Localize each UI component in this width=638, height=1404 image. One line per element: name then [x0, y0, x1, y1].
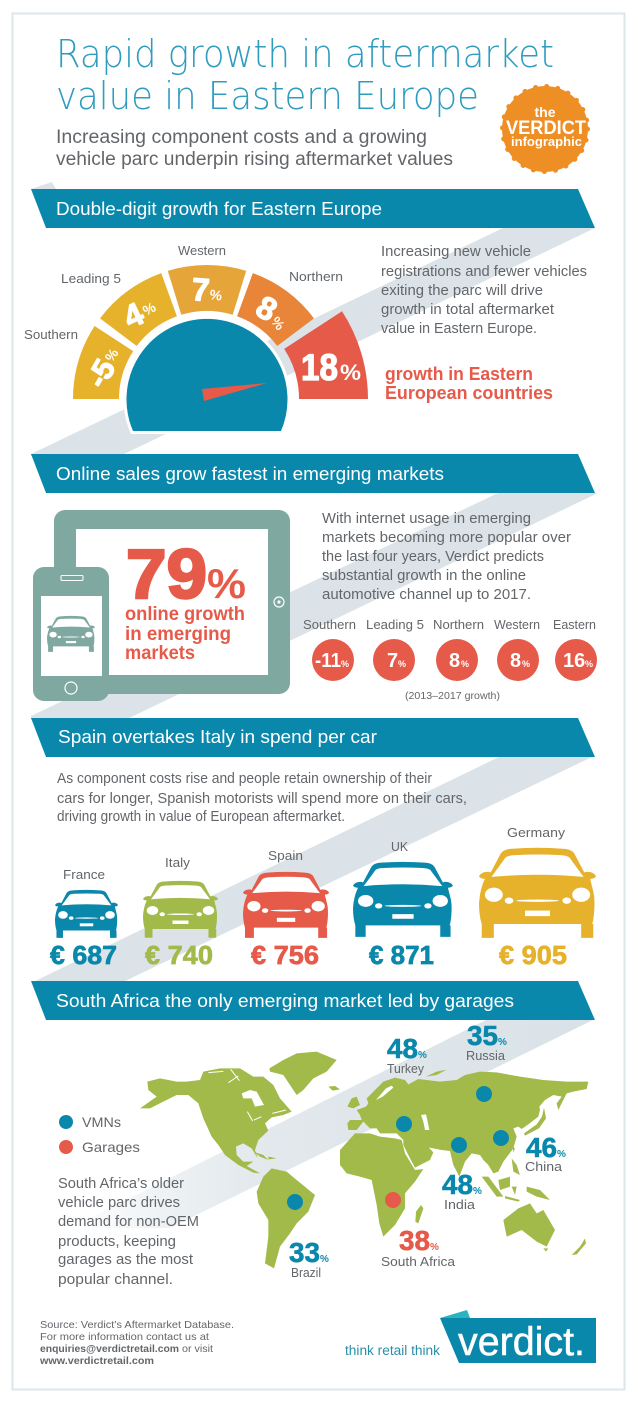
car: Germany: € 905 — [499, 940, 567, 970]
text: South Africa explanation: vehicle parc drives — [58, 1195, 180, 1211]
gauge segment: Western: Western — [178, 243, 226, 258]
logo: verdict — [440, 1310, 596, 1364]
source note — [39, 1319, 234, 1367]
title — [56, 32, 554, 118]
badge: the Verdict infographic: infographic — [511, 135, 582, 149]
stat: 79% online growth: in emerging — [125, 624, 231, 645]
region: Southern: % — [341, 659, 349, 669]
text: vehicle registrations: registrations and fewer vehicles — [381, 264, 587, 280]
text: internet usage: With internet usage in emerging — [322, 511, 531, 527]
legend — [59, 1114, 140, 1155]
banner: Spain overtakes Italy — [31, 718, 595, 757]
gauge segment: Leading 5 — [61, 271, 177, 346]
badge: the Verdict infographic — [502, 86, 588, 172]
region: Northern: % — [461, 659, 469, 669]
text: component costs: As component costs rise and people retain ownership of their — [57, 771, 432, 787]
gauge segment: Southern: -5 — [80, 354, 122, 394]
label: China 46%: % — [557, 1149, 566, 1160]
label: Russia 35% — [466, 1020, 507, 1063]
region: Eastern: 16 — [563, 650, 585, 672]
text: internet usage — [322, 511, 571, 603]
map marker: India — [451, 1137, 467, 1153]
label: Brazil 33% — [289, 1237, 329, 1280]
label: South Africa 38%: South Africa — [381, 1254, 456, 1269]
label: Russia 35%: 35 — [467, 1020, 498, 1051]
subtitle — [56, 127, 453, 170]
banner: online sales: Online sales grow fastest in emerging markets — [56, 464, 444, 484]
text: South Africa explanation: garages as the most — [58, 1252, 193, 1268]
car: Italy: Italy — [165, 855, 191, 870]
car: UK: UK — [391, 839, 408, 854]
label: China 46% — [525, 1132, 566, 1174]
label: India 48%: % — [473, 1186, 482, 1197]
map: Africa and Eurasia — [340, 1070, 588, 1255]
label: China 46%: 46 — [526, 1132, 557, 1163]
gauge segment: Eastern 18% — [284, 311, 368, 399]
subtitle: Increasing component costs and a growing — [56, 127, 427, 148]
gauge segment: Western: 7 — [191, 271, 211, 308]
car: Spain — [243, 848, 329, 970]
text: vehicle registrations: value in Eastern Europe. — [381, 321, 537, 337]
banner: online sales — [31, 454, 595, 493]
map marker: Turkey — [396, 1116, 412, 1132]
label: Russia 35%: % — [498, 1037, 507, 1048]
label: Brazil 33%: % — [320, 1254, 329, 1265]
car: Spain: Spain — [268, 848, 303, 863]
gauge segment: Southern: Southern — [24, 327, 78, 342]
region: Leading 5: % — [398, 659, 406, 669]
legend: Garages — [82, 1139, 140, 1155]
car: Germany — [479, 825, 596, 970]
region: Southern: Southern — [303, 617, 356, 632]
text: South Africa explanation: demand for non-OEM — [58, 1214, 199, 1230]
label: Turkey 48%: % — [418, 1050, 427, 1061]
label: Brazil 33%: 33 — [289, 1237, 320, 1268]
banner: Spain overtakes Italy: Spain overtakes Italy in spend per car — [58, 727, 377, 747]
map marker: South Africa — [385, 1192, 401, 1208]
title: Rapid growth in aftermarket — [56, 32, 554, 76]
region: Eastern — [553, 617, 597, 681]
label: India 48% — [442, 1169, 482, 1212]
car: UK: € 871 — [369, 940, 434, 970]
stat: 79% online growth: 79 — [126, 535, 207, 613]
region: Leading 5 — [366, 617, 424, 681]
gauge segment: Eastern 18%: 18 — [301, 347, 338, 388]
source note: For more information contact us at — [40, 1331, 209, 1343]
icon: tablet — [54, 510, 290, 694]
callout: growth in Eastern European countries: growth in Eastern — [385, 364, 533, 384]
text: component costs — [57, 771, 467, 825]
source note: or visit — [182, 1343, 213, 1355]
car: UK — [353, 839, 453, 970]
region: Western: Western — [494, 617, 540, 632]
badge: the Verdict infographic: the — [534, 104, 556, 120]
subtitle: vehicle parc underpin rising aftermarket values — [56, 149, 453, 170]
source note: Source: Verdict’s Aftermarket Database. — [40, 1319, 234, 1331]
text: internet usage: automotive channel up to 2017. — [322, 587, 531, 603]
map marker: Brazil — [287, 1194, 303, 1210]
text: South Africa explanation: South Africa’s older — [58, 1176, 184, 1192]
title: value in Eastern Europe — [56, 74, 479, 118]
gauge segment: Leading 5: 4 — [118, 295, 149, 335]
car: France — [50, 867, 118, 970]
region: Northern — [433, 617, 484, 681]
label: Russia 35%: Russia — [466, 1048, 506, 1063]
banner: South Africa — [31, 981, 595, 1020]
text: internet usage: markets becoming more popular over — [322, 530, 571, 546]
callout: growth in Eastern European countries — [385, 364, 553, 403]
source note: enquiries@verdictretail.com — [40, 1343, 179, 1355]
label: Brazil 33%: Brazil — [291, 1265, 321, 1280]
label: Turkey 48%: 48 — [387, 1033, 418, 1064]
gauge segment: Southern — [24, 326, 133, 399]
gauge segment: Northern — [237, 269, 343, 346]
gauge chart — [24, 243, 368, 432]
region: Eastern: Eastern — [553, 617, 596, 632]
label: South Africa 38%: 38 — [399, 1225, 430, 1256]
region: Leading 5: Leading 5 — [366, 617, 424, 632]
region: Northern: Northern — [433, 617, 484, 632]
text: vehicle registrations: Increasing new vehicle — [381, 244, 531, 260]
region: Southern — [303, 617, 356, 681]
car: Germany: Germany — [507, 825, 566, 840]
car: France: € 687 — [50, 940, 117, 970]
legend: VMNs — [82, 1114, 121, 1130]
banner: double-digit growth: Double-digit growth for Eastern Europe — [56, 199, 382, 219]
gauge segment: Northern: % — [268, 313, 289, 333]
gauge segment: Western — [168, 243, 246, 315]
stat: 79% online growth: % — [207, 560, 246, 607]
car: Italy: € 740 — [145, 940, 213, 970]
region: Western: 8 — [510, 650, 521, 672]
text: vehicle registrations — [381, 244, 587, 337]
region: Leading 5: 7 — [387, 650, 398, 672]
text: component costs: driving growth in value of European aftermarket. — [57, 809, 345, 825]
text: internet usage: the last four years, Verdict predicts — [322, 549, 544, 565]
text: internet usage: substantial growth in the online — [322, 568, 526, 584]
label: South Africa 38%: % — [430, 1242, 439, 1253]
callout: growth in Eastern European countries: European countries — [385, 383, 553, 403]
region: Western: % — [522, 659, 530, 669]
region: Eastern: % — [585, 659, 593, 669]
label: India 48%: India — [444, 1197, 476, 1212]
stat: 79% online growth: markets — [125, 643, 195, 664]
banner: double-digit growth — [31, 182, 595, 228]
gauge segment: Western: % — [209, 286, 224, 304]
text: South Africa explanation — [58, 1176, 199, 1288]
gauge segment: Southern: % — [101, 345, 122, 365]
gauge segment: Northern: Northern — [289, 269, 343, 284]
chart: online growth by region — [303, 617, 597, 702]
gauge segment: Northern: 8 — [250, 288, 283, 328]
label: China 46%: China — [525, 1159, 563, 1174]
car: Italy — [143, 855, 218, 970]
car: Spain: € 756 — [251, 940, 319, 970]
text: South Africa explanation: popular channel. — [58, 1272, 173, 1288]
map marker: Russia — [476, 1086, 492, 1102]
gauge needle — [202, 383, 267, 401]
logo: verdict: verdict. — [458, 1320, 585, 1364]
gauge dial — [125, 317, 289, 432]
label: Turkey 48% — [387, 1033, 427, 1076]
banner: South Africa: South Africa the only emerging market led by garages — [56, 991, 514, 1011]
note: growth period: (2013–2017 growth) — [405, 690, 500, 702]
icon: phone — [33, 567, 109, 701]
map: Americas and Greenland — [140, 1052, 340, 1268]
source note: www.verdictretail.com — [39, 1355, 154, 1367]
tagline: think retail think — [345, 1343, 440, 1358]
region: Western — [494, 617, 540, 681]
region: Northern: 8 — [449, 650, 460, 672]
text: vehicle registrations: exiting the parc will drive — [381, 283, 543, 299]
gauge segment: Leading 5: % — [140, 298, 159, 319]
world map — [140, 1052, 588, 1268]
stat: 79% online growth: online growth — [125, 604, 245, 625]
gauge segment: Eastern 18%: % — [340, 360, 361, 385]
label: India 48%: 48 — [442, 1169, 473, 1200]
car: France: France — [63, 867, 105, 882]
stat: 79% online growth — [125, 535, 246, 664]
gauge segment: Leading 5: Leading 5 — [61, 271, 121, 286]
label: Turkey 48%: Turkey — [387, 1061, 424, 1076]
region: Southern: -11 — [315, 650, 341, 672]
label: South Africa 38% — [381, 1225, 456, 1269]
text: South Africa explanation: products, keeping — [58, 1234, 176, 1250]
map marker: China — [493, 1130, 509, 1146]
text: component costs: cars for longer, Spanish motorists will spend more on their cars, — [57, 791, 467, 807]
text: vehicle registrations: growth in total aftermarket — [381, 302, 554, 318]
badge: the Verdict infographic: VERDICT — [506, 118, 586, 139]
